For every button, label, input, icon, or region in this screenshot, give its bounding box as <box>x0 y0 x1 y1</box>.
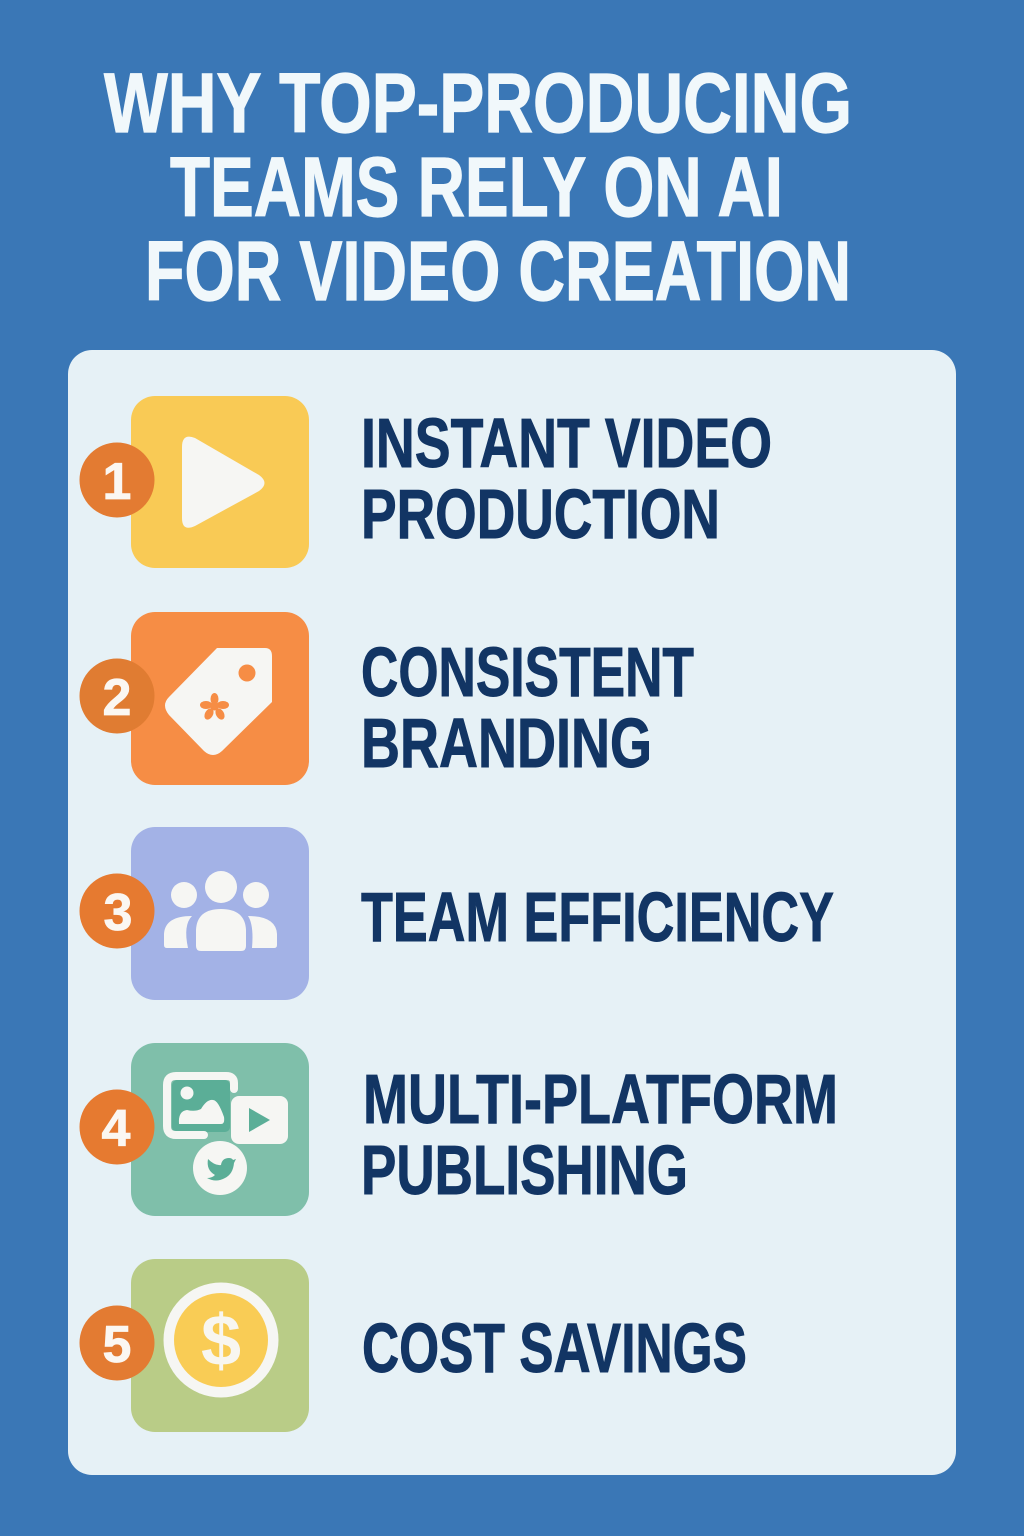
item 1: instant video production <box>80 396 772 568</box>
icon: social media <box>131 1043 309 1216</box>
title: TEAMS RELY ON AI <box>170 140 783 234</box>
heading: instant video production <box>361 404 772 553</box>
number badge 4: 4 <box>102 1100 131 1158</box>
icon: dollar coin <box>131 1259 309 1432</box>
heading: instant video production: PRODUCTION <box>361 475 720 553</box>
heading: multi-platform publishing: PUBLISHING <box>361 1131 688 1209</box>
item 3: team efficiency <box>80 827 834 1000</box>
icon: brand tag <box>131 612 309 785</box>
item 4: multi-platform publishing <box>80 1043 838 1216</box>
heading: consistent branding <box>361 633 694 782</box>
panel: benefits list <box>68 350 956 1475</box>
heading: consistent branding: CONSISTENT <box>361 633 694 711</box>
number badge 1 <box>80 442 154 518</box>
icon: team <box>131 827 309 1000</box>
number badge 5: 5 <box>103 1316 131 1374</box>
number badge 2 <box>80 658 154 734</box>
heading: instant video production: INSTANT VIDEO <box>361 404 772 482</box>
heading: team efficiency: TEAM EFFICIENCY <box>361 878 834 956</box>
item 2: consistent branding <box>80 612 694 785</box>
number badge 3: 3 <box>104 884 132 942</box>
number badge 1: 1 <box>103 453 131 511</box>
heading: multi-platform publishing <box>361 1060 838 1209</box>
heading: multi-platform publishing: MULTI-PLATFORM <box>363 1060 838 1138</box>
number badge 4 <box>80 1090 154 1164</box>
icon: play button <box>131 396 309 568</box>
title: WHY TOP-PRODUCING <box>104 56 852 150</box>
item 5: cost savings <box>80 1259 747 1432</box>
heading: consistent branding: BRANDING <box>361 704 652 782</box>
icon: dollar coin: $ <box>201 1301 241 1381</box>
number badge 5 <box>80 1306 154 1380</box>
title <box>104 56 852 318</box>
heading: cost savings: COST SAVINGS <box>362 1309 747 1387</box>
number badge 3 <box>80 874 154 948</box>
number badge 2: 2 <box>103 669 131 727</box>
